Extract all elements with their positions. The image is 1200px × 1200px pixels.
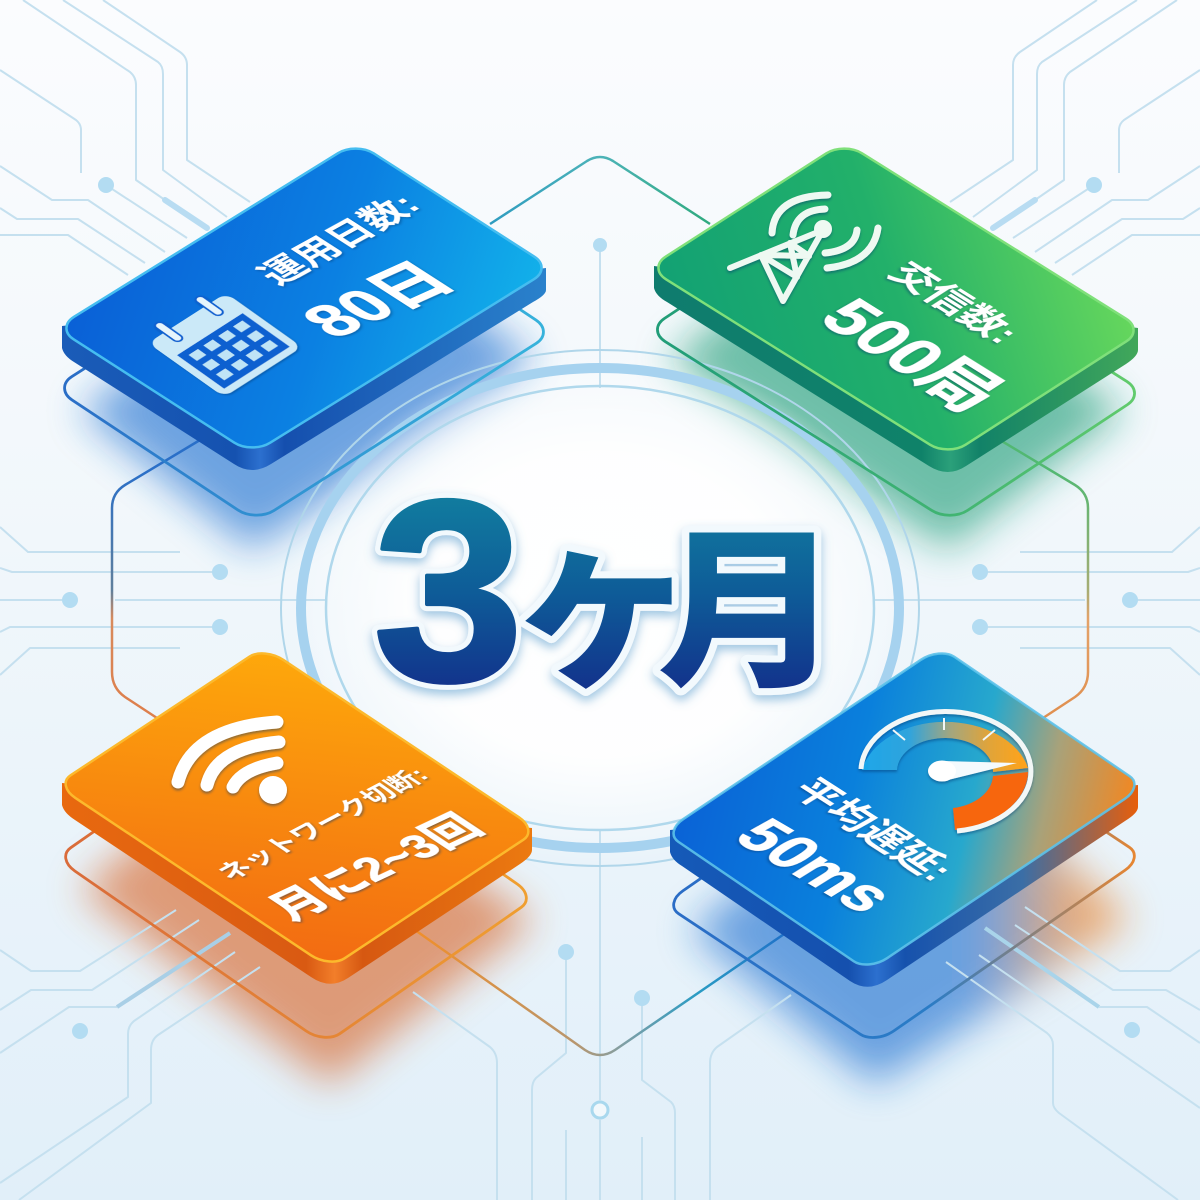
title: 3 months: 3 [373, 448, 524, 736]
label: stations contacted: 交信数: [880, 256, 1028, 350]
label: operating days: 運用日数: [250, 189, 430, 291]
hexagon connector [112, 157, 1088, 1055]
label: average latency: 平均遅延: [783, 772, 963, 888]
card: stations contacted [648, 142, 1144, 472]
value: 80 days: 80日 [286, 253, 470, 347]
icon: radio tower [730, 195, 878, 301]
colored card shadows [80, 225, 1130, 1085]
title: 3 months: 3 [373, 448, 524, 736]
value: 50 ms: 50ms [720, 810, 910, 922]
label: network disconnects: ネットワーク切断: [211, 763, 435, 885]
icon: speed gauge [861, 712, 1031, 831]
title: 3 months: 月 [657, 473, 841, 722]
title: 3 months: 月 [657, 473, 841, 722]
title: 3 months: ヶ [510, 453, 696, 723]
outline frames beneath cards [54, 198, 1145, 1044]
title: 3 months [373, 448, 841, 736]
value: 500 stations: 500局 [805, 288, 1019, 422]
concentric rings around the title [115, 238, 1085, 1101]
title: 3 months: ヶ [510, 453, 696, 723]
card: network disconnects [56, 647, 538, 984]
value: 2-3 per month: 月に2~3回 [257, 807, 493, 927]
card: average latency [664, 647, 1144, 987]
card: operating days [56, 142, 552, 470]
icon: wifi [178, 722, 287, 804]
icon: calendar [137, 285, 302, 397]
